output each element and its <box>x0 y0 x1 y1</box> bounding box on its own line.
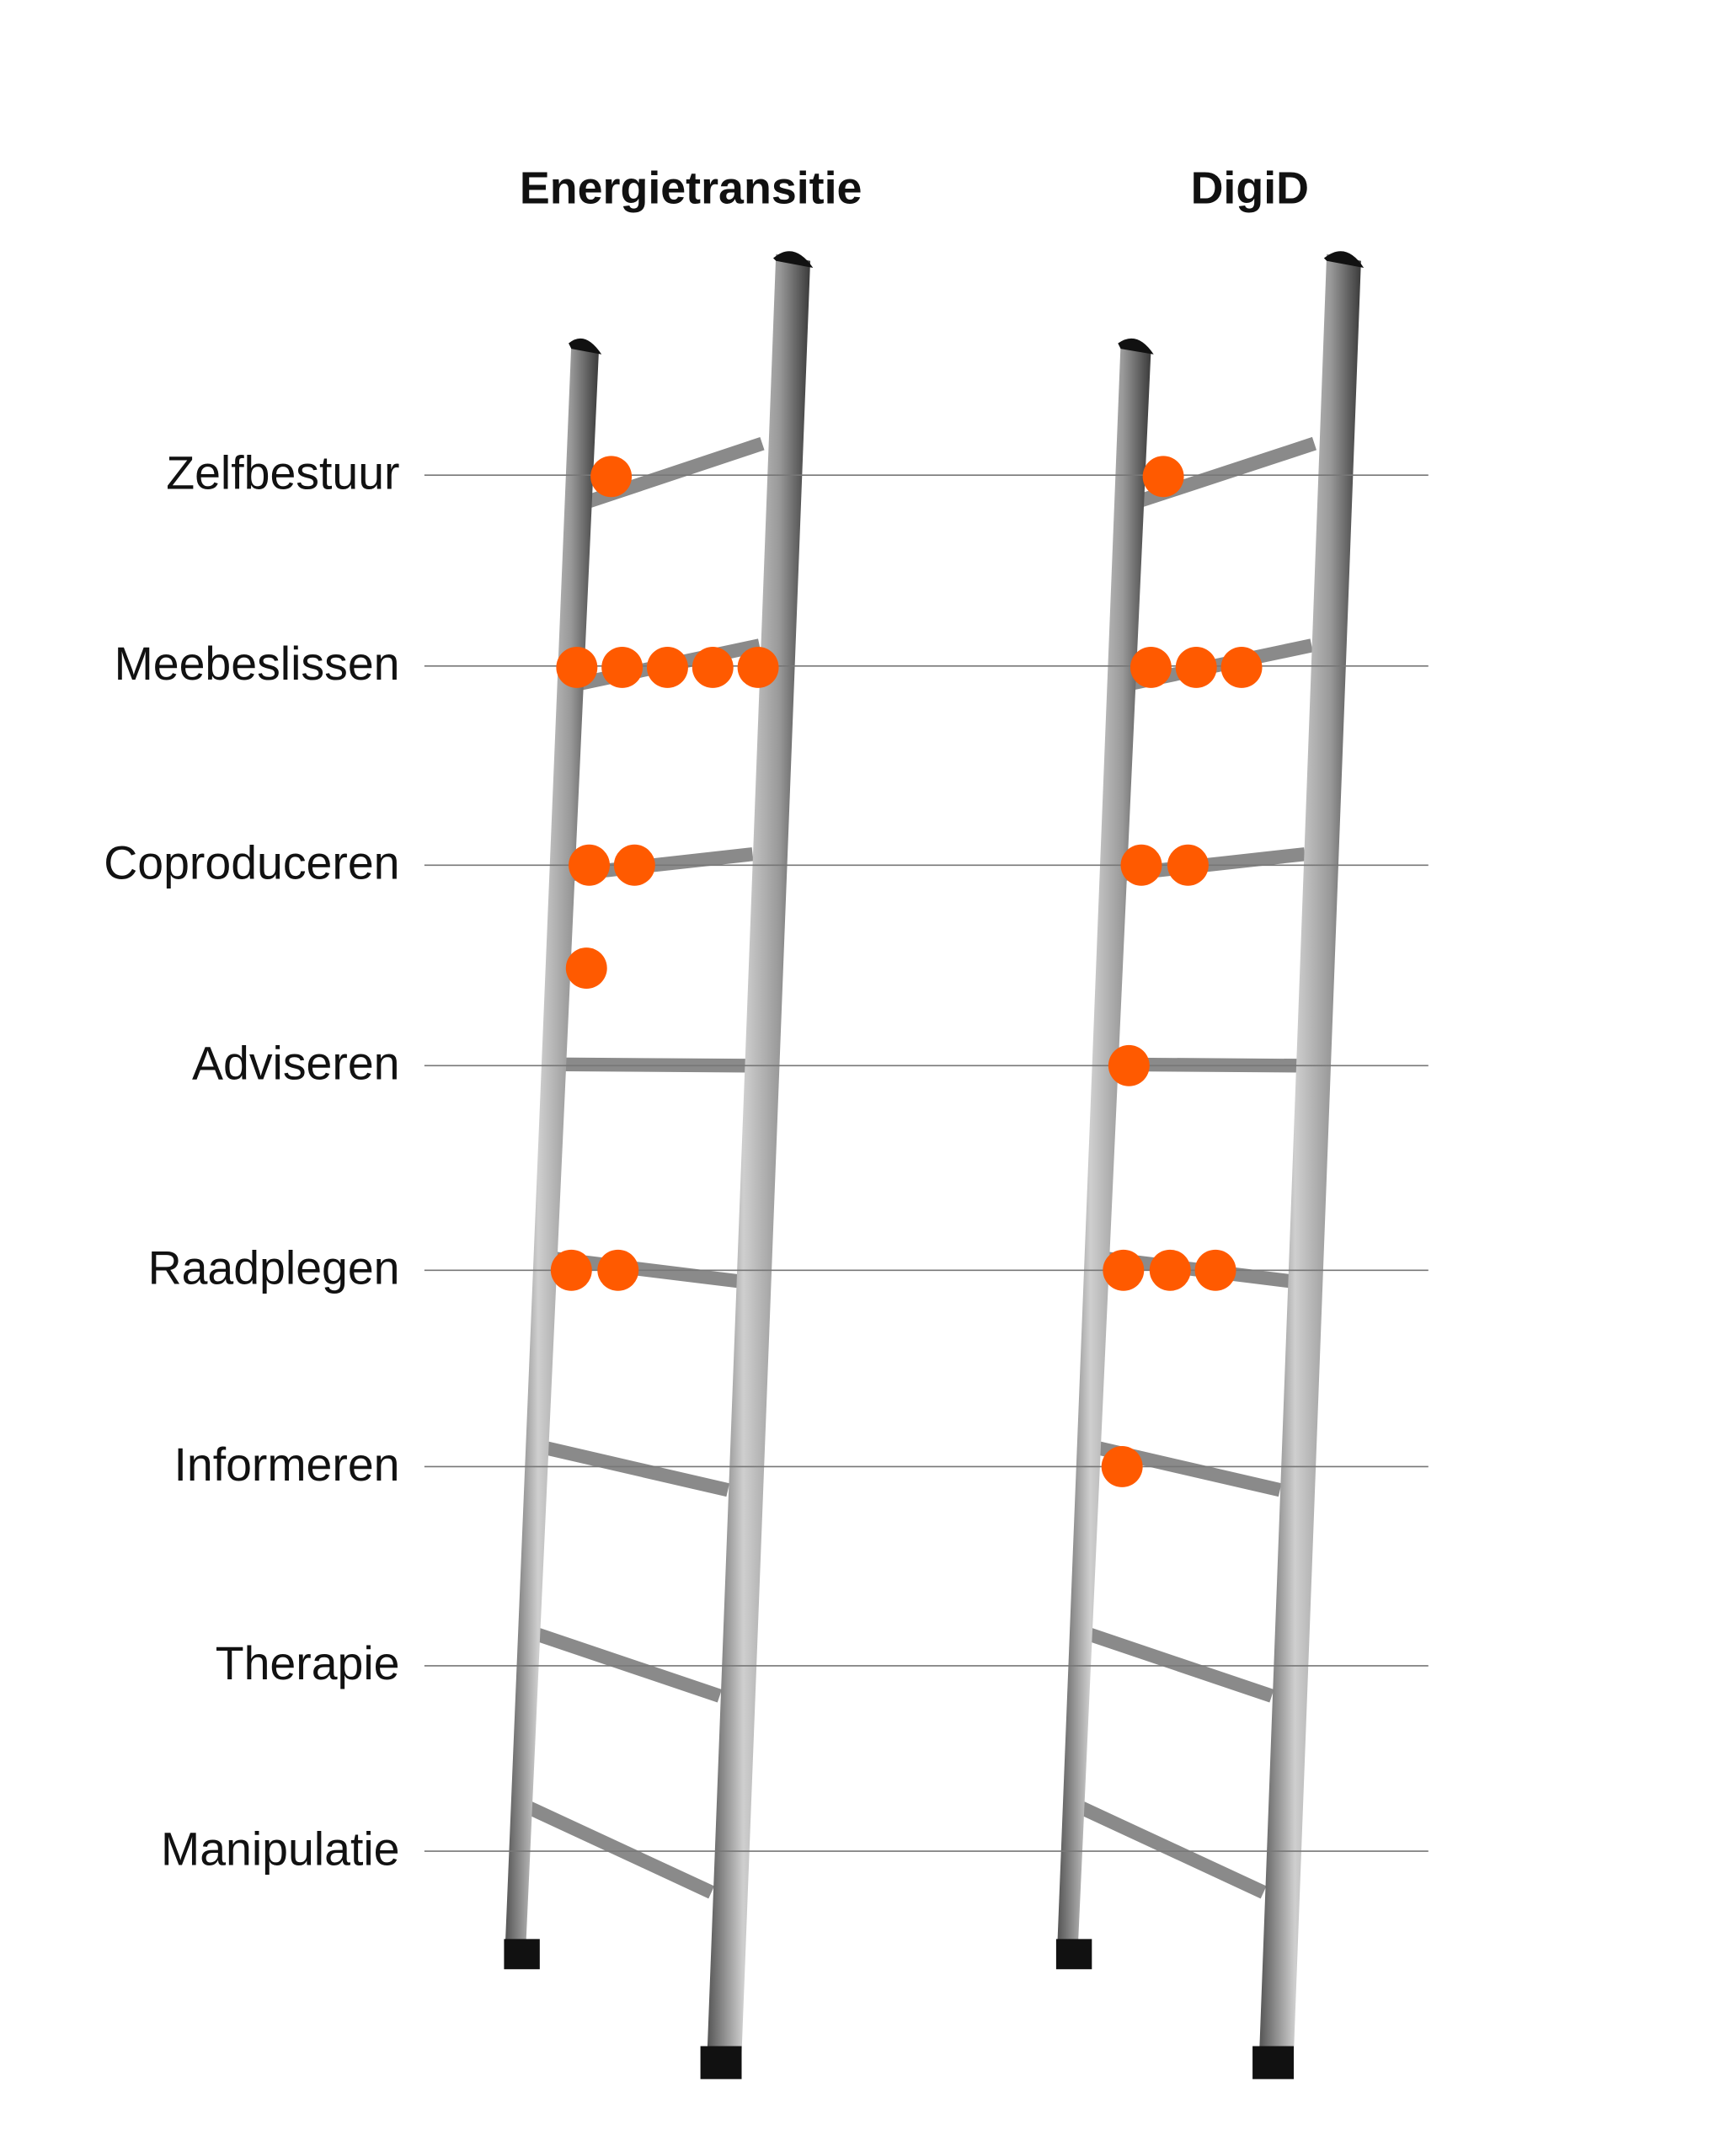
title: DigiD: DigiD <box>1191 163 1309 213</box>
level labels: Raadplegen <box>148 1242 399 1294</box>
dots: Energietransitie <box>551 456 779 1291</box>
level labels: Zelfbestuur <box>166 446 399 499</box>
dots: DigiD <box>1102 456 1262 1487</box>
level labels: Meebeslissen <box>115 638 399 690</box>
level lines <box>425 475 1429 1851</box>
level labels: Therapie <box>216 1637 399 1689</box>
title: Energietransitie: Energietransitie <box>520 163 862 213</box>
level labels: Manipulatie <box>161 1822 399 1875</box>
level labels <box>104 446 399 1875</box>
ladder: Energietransitie <box>504 251 813 2079</box>
level labels: Coproduceren <box>104 837 399 889</box>
level labels: Adviseren <box>192 1038 399 1090</box>
level labels: Informeren <box>174 1438 399 1491</box>
ladder: DigiD <box>1056 251 1364 2079</box>
